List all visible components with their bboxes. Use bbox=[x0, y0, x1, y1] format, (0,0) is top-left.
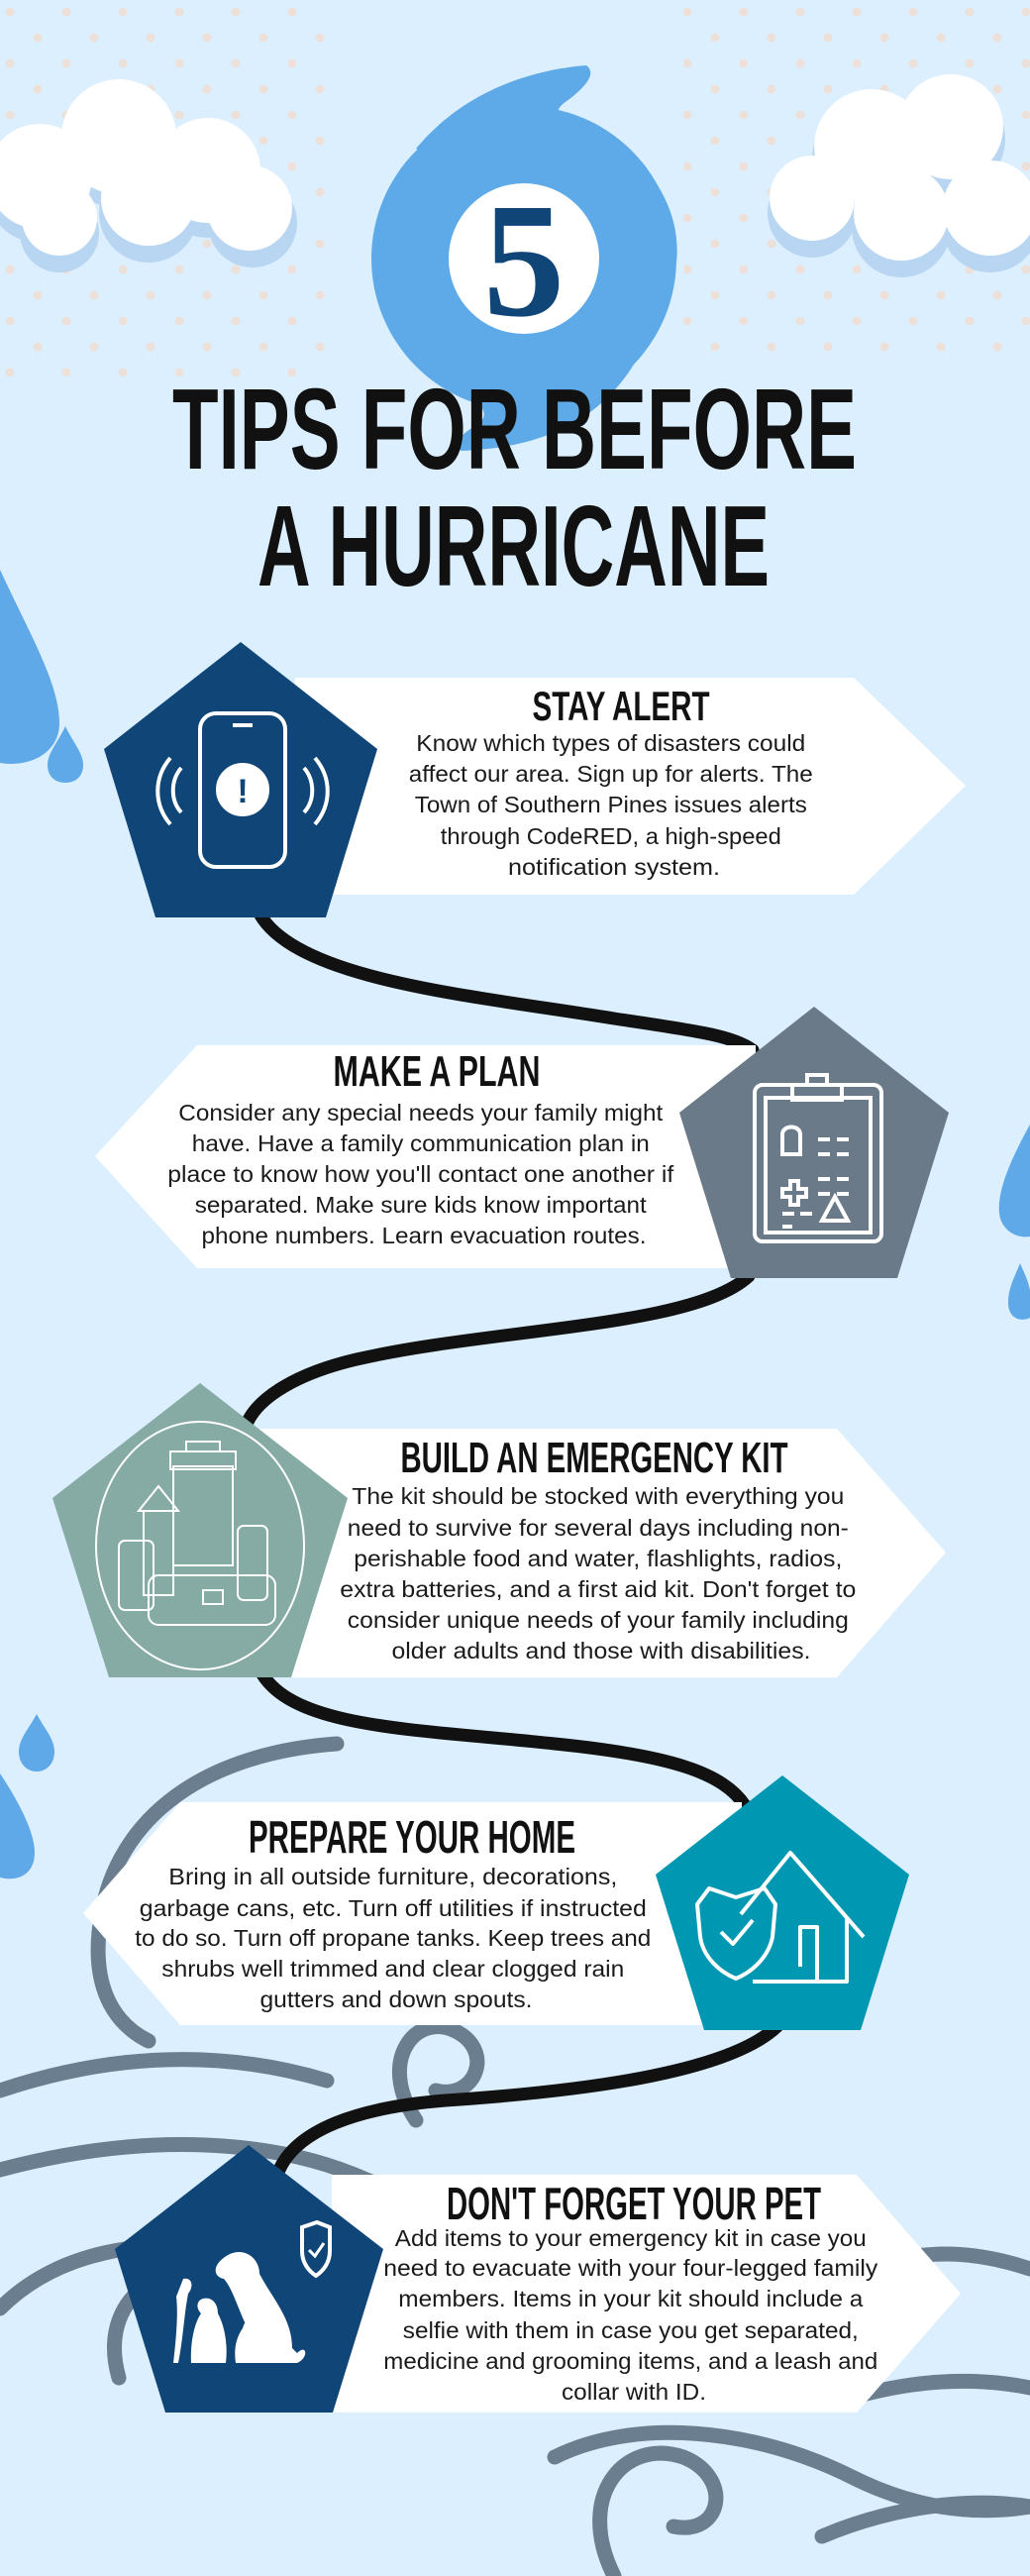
panel: don't forget your pet: Add items to your emergency kit in case you bbox=[395, 2225, 867, 2251]
panel: stay alert: Town of Southern Pines issues alerts bbox=[415, 792, 807, 817]
panel: build an emergency kit: need to survive for several days including non- bbox=[348, 1515, 849, 1541]
hurricane symbol with 5: 5 bbox=[483, 169, 565, 351]
panel: make a plan: separated. Make sure kids know important bbox=[195, 1192, 647, 1218]
panel: stay alert: affect our area. Sign up for alerts. The bbox=[409, 761, 813, 787]
panel: make a plan: MAKE A PLAN bbox=[333, 1047, 541, 1096]
panel: stay alert: Know which types of disasters could bbox=[416, 730, 805, 756]
panel: don't forget your pet: DON'T FORGET YOUR PET bbox=[447, 2178, 821, 2229]
panel: prepare your home: garbage cans, etc. Turn off utilities if instructed bbox=[140, 1895, 647, 1921]
panel: make a plan: have. Have a family communication plan in bbox=[192, 1130, 650, 1156]
panel: don't forget your pet: collar with ID. bbox=[562, 2379, 706, 2405]
hurricane symbol with 5 bbox=[371, 65, 677, 451]
icon: phone alert bbox=[157, 713, 328, 867]
panel: make a plan: place to know how you'll contact one another if bbox=[167, 1161, 674, 1187]
droplets bbox=[0, 570, 1030, 1878]
icon: clipboard bbox=[755, 1075, 881, 1241]
panel: stay alert: notification system. bbox=[508, 854, 720, 880]
panel: build an emergency kit: extra batteries, and a first aid kit. Don't forget to bbox=[340, 1576, 856, 1602]
panel: stay alert: through CodeRED, a high-speed bbox=[441, 823, 781, 849]
icon: pets with shield bbox=[173, 2222, 330, 2363]
panel: stay alert bbox=[104, 642, 966, 917]
panel: stay alert: ! bbox=[237, 773, 249, 810]
panel: prepare your home: PREPARE YOUR HOME bbox=[249, 1811, 575, 1863]
panel: build an emergency kit: older adults and those with disabilities. bbox=[392, 1638, 810, 1664]
panel: prepare your home bbox=[83, 1775, 909, 2030]
panel: build an emergency kit: BUILD AN EMERGENCY KIT bbox=[400, 1434, 788, 1482]
panel: prepare your home: Bring in all outside furniture, decorations, bbox=[168, 1864, 617, 1889]
panel: don't forget your pet: medicine and grooming items, and a leash and bbox=[383, 2348, 877, 2374]
panel: don't forget your pet bbox=[115, 2145, 961, 2413]
panel: don't forget your pet: members. Items in your kit should include a bbox=[398, 2286, 864, 2311]
panel: don't forget your pet: need to evacuate with your four-legged family bbox=[383, 2255, 878, 2281]
panel: stay alert: STAY ALERT bbox=[533, 683, 710, 729]
panel: prepare your home: shrubs well trimmed and clear clogged rain bbox=[161, 1956, 624, 1982]
panel: build an emergency kit bbox=[52, 1383, 946, 1677]
swirls background bbox=[0, 1744, 1030, 2576]
panel: make a plan: Consider any special needs your family might bbox=[178, 1100, 664, 1126]
icon: kit supplies bbox=[96, 1422, 304, 1669]
panel: build an emergency kit: consider unique needs of your family including bbox=[348, 1607, 849, 1633]
panel: make a plan: phone numbers. Learn evacuation routes. bbox=[202, 1223, 646, 1248]
panel: build an emergency kit: The kit should be stocked with everything you bbox=[352, 1483, 844, 1509]
panel: prepare your home: gutters and down spouts. bbox=[259, 1986, 533, 2012]
connecting path bbox=[248, 913, 778, 2170]
panel: build an emergency kit: perishable food and water, flashlights, radios, bbox=[354, 1546, 842, 1571]
icon: house with shield bbox=[697, 1853, 864, 1982]
panel: don't forget your pet: selfie with them in case you get separated, bbox=[403, 2317, 859, 2343]
clouds bbox=[0, 74, 1030, 277]
panel: prepare your home: to do so. Turn off propane tanks. Keep trees and bbox=[135, 1925, 651, 1951]
title bbox=[172, 365, 857, 610]
panel: make a plan bbox=[95, 1007, 949, 1278]
